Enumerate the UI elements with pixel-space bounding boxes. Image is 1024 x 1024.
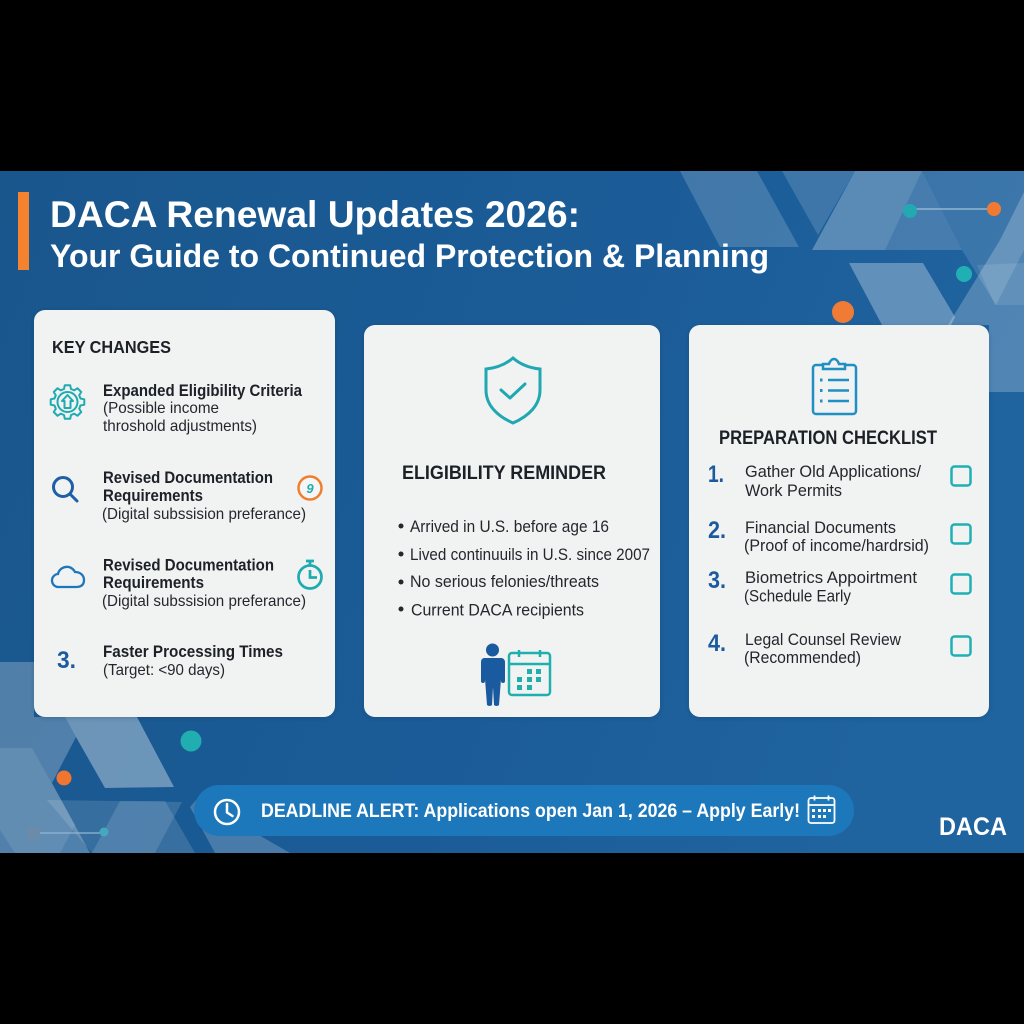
icon: shield: [486, 358, 540, 423]
icon: calendar: [509, 650, 550, 695]
item 3: Biometrics Appoirtment: [745, 569, 917, 587]
item: expanded eligibility: (Possible income: [103, 400, 219, 417]
item 1: Work Permits: [745, 482, 842, 500]
item 2: Financial Documents: [745, 519, 896, 537]
item: faster processing: Faster Processing Times: [103, 643, 283, 661]
item 3: [708, 567, 970, 606]
eligibility card: [364, 325, 660, 717]
item: revised documentation repeat: Revised Documentation: [103, 556, 274, 574]
item 2: 2.: [708, 517, 726, 544]
icon: stopwatch: [298, 561, 322, 588]
number: 3: 3.: [57, 647, 76, 674]
item 2: [708, 517, 970, 555]
DACA logo: DACA: [939, 813, 1007, 841]
item: revised documentation: Revised Documentation: [103, 469, 273, 487]
item: faster processing: [103, 643, 283, 679]
item: revised documentation repeat: [102, 556, 306, 610]
main title: DACA Renewal Updates 2026:: [50, 194, 580, 235]
item 2: (Proof of income/hardrsid): [744, 537, 929, 555]
item 4: [708, 630, 970, 667]
item: revised documentation: Requirements: [103, 487, 203, 505]
item 4: Legal Counsel Review: [745, 631, 901, 649]
title block: [18, 192, 769, 274]
heading: eligibility reminder: ELIGIBILITY REMINDER: [402, 463, 606, 484]
bullet list: No serious felonies/threats: [410, 573, 599, 591]
background shapes: bottom left: [0, 662, 290, 853]
item 1: [708, 461, 970, 500]
item: revised documentation repeat: Requirements: [103, 574, 204, 592]
bullet list: Current DACA recipients: [411, 602, 584, 620]
alert text: DEADLINE ALERT: Applications open Jan 1, 2026 – Apply Early!: [261, 800, 800, 822]
deadline alert banner: [194, 785, 854, 836]
icon: magnifier: [54, 478, 77, 501]
icon: clock: [215, 800, 239, 824]
item: faster processing: (Target: <90 days): [103, 662, 225, 679]
icon: cloud: [52, 567, 84, 587]
bullet list: [398, 518, 650, 620]
item 3: 3.: [708, 567, 726, 594]
item: revised documentation: (Digital subssision preferance): [102, 506, 306, 523]
item 1: 1.: [708, 461, 724, 488]
background shapes: top right: [680, 171, 1024, 392]
alert pill: [194, 785, 854, 836]
title accent bar: [18, 192, 29, 270]
item: expanded eligibility: [103, 382, 303, 435]
item: expanded eligibility: throshold adjustments): [103, 418, 257, 435]
key changes card: [34, 310, 335, 717]
item: expanded eligibility: Expanded Eligibility Criteria: [103, 382, 303, 400]
item: revised documentation repeat: (Digital subssision preferance): [102, 593, 306, 610]
item 3: (Schedule Early: [744, 588, 852, 606]
panel: eligibility reminder: [364, 325, 660, 717]
background banner: [0, 171, 1024, 853]
decorative dots and connectors: [26, 202, 1001, 840]
item 4: (Recommended): [744, 649, 861, 667]
item 1: Gather Old Applications/: [745, 463, 921, 481]
checklist card: [689, 325, 989, 717]
icon: clipboard: [813, 359, 856, 414]
bullet list: Lived continuuils in U.S. since 2007: [410, 546, 650, 564]
icon: orange badge: 9: [306, 481, 314, 496]
icon: orange badge: [298, 476, 322, 500]
icon: white calendar: [808, 796, 834, 823]
panel: key changes: [34, 310, 335, 717]
panel: preparation checklist: [689, 325, 989, 717]
icon: gear with up arrow: [51, 385, 84, 419]
subtitle: Your Guide to Continued Protection & Planning: [50, 238, 769, 274]
item: revised documentation: [102, 469, 306, 523]
item 4: 4.: [708, 630, 726, 657]
heading: key changes: KEY CHANGES: [52, 337, 171, 357]
bullet list: Arrived in U.S. before age 16: [410, 518, 609, 536]
icon: person: [481, 644, 505, 706]
heading: preparation checklist: PREPARATION CHECKLIST: [719, 428, 937, 449]
